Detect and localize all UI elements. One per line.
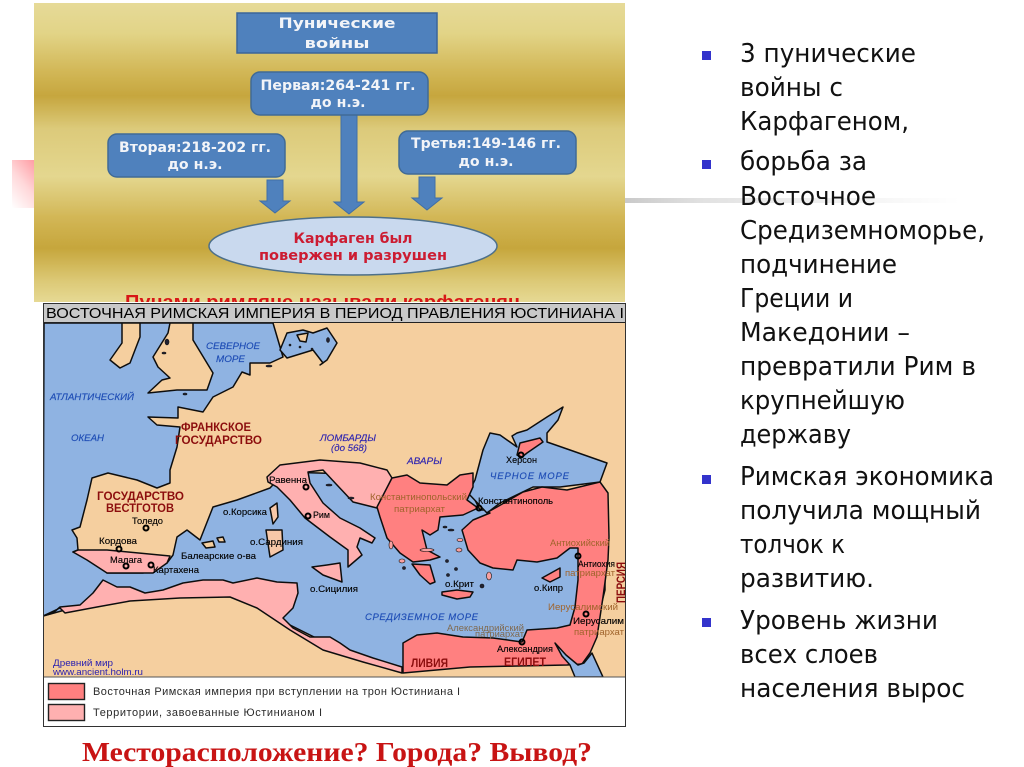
Sardinia xyxy=(266,530,283,557)
heading box: Punic wars: войны xyxy=(304,36,370,52)
bullet 2: Восточное xyxy=(740,182,876,212)
map frame xyxy=(44,304,626,726)
city labels: Иерусалим xyxy=(573,616,624,626)
legend: Территории, завоеванные Юстинианом I xyxy=(93,707,322,719)
bullet 3: получила мощный xyxy=(740,496,981,526)
sea labels: АТЛАНТИЧЕСКИЙ xyxy=(49,391,134,403)
Italy and Dalmatia xyxy=(267,460,392,567)
heading box: Punic wars xyxy=(237,13,437,53)
sea labels: СРЕДИЗЕМНОЕ МОРЕ xyxy=(365,612,479,623)
sea labels: ЧЕРНОЕ МОРЕ xyxy=(490,471,570,482)
box: first war: до н.э. xyxy=(310,95,366,111)
city labels: о.Корсика xyxy=(223,507,267,517)
bullet 3: развитию. xyxy=(740,564,874,594)
box: second war: Вторая:218-202 гг. xyxy=(119,140,271,156)
city labels: о.Кипр xyxy=(534,583,563,593)
map credit: www.ancient.holm.ru xyxy=(52,667,143,677)
box: second war xyxy=(108,134,285,177)
bullet 4: Уровень жизни xyxy=(740,606,938,636)
patriarchate labels xyxy=(370,492,624,639)
box: second war: до н.э. xyxy=(168,157,222,173)
state labels: ЛИВИЯ xyxy=(411,656,448,670)
city labels: Равенна xyxy=(269,475,307,485)
Britain xyxy=(148,323,213,393)
North Africa conquered territory xyxy=(43,578,402,673)
sea labels: ОКЕАН xyxy=(71,433,104,444)
bullet 4: всех слоев xyxy=(740,640,878,670)
box: third war: Третья:149-146 гг. xyxy=(411,136,561,152)
Gulf of Suez and Red Sea xyxy=(555,643,603,677)
bottom question caption: Месторасположение? Города? Вывод? xyxy=(82,737,592,767)
city labels: о.Крит xyxy=(445,579,474,589)
Crete xyxy=(442,590,473,599)
city labels: Антиохия xyxy=(578,559,615,569)
state labels: ГОСУДАРСТВО xyxy=(175,433,262,447)
sea labels: (до 568) xyxy=(331,443,367,454)
bullet 1 xyxy=(702,39,916,137)
city labels: о.Сицилия xyxy=(310,584,358,594)
arrow: second war to Carthage xyxy=(260,180,290,213)
bullet 4 xyxy=(702,606,965,704)
patriarchate labels: патриархат xyxy=(565,568,615,578)
state labels xyxy=(97,420,628,670)
heading box: Punic wars: Пунические xyxy=(278,16,396,32)
patriarchate labels: Константинопольский xyxy=(370,492,467,502)
legend: Восточная Римская империя при вступлении на трон Юстиниана I xyxy=(93,686,460,698)
map title bar: ВОСТОЧНАЯ РИМСКАЯ ИМПЕРИЯ В ПЕРИОД ПРАВЛЕНИЯ ЮСТИНИАНА I xyxy=(46,305,624,322)
patriarchate labels: Александрийский xyxy=(447,623,524,633)
Balearic islands xyxy=(202,537,225,548)
bullet list xyxy=(702,39,994,704)
state labels: ВЕСТГОТОВ xyxy=(106,501,174,515)
bullet 3: толчок к xyxy=(740,530,845,560)
city labels: Толедо xyxy=(132,516,163,526)
box: first war: Первая:264-241 гг. xyxy=(260,78,416,94)
patriarchate labels: Антиохийский xyxy=(550,538,610,548)
bullet 1: войны с xyxy=(740,73,843,103)
arrow: third war to Carthage xyxy=(412,177,442,210)
bullet 1: Карфагеном, xyxy=(740,107,909,137)
Peloponnese xyxy=(412,564,435,584)
state labels: ГОСУДАРСТВО xyxy=(97,489,184,503)
bullet 2: превратили Рим в xyxy=(740,352,976,382)
city labels: Балеарские о-ва xyxy=(181,551,256,561)
South Spain conquered territory xyxy=(73,550,170,573)
sea labels: АВАРЫ xyxy=(406,456,443,467)
clipped red caption: Пунами римляне называли карфагенян xyxy=(125,292,520,312)
Crimea xyxy=(517,438,543,457)
map background land xyxy=(43,303,626,727)
Sicily xyxy=(312,563,342,582)
patriarchate labels: патриархат xyxy=(574,627,624,637)
state labels: ЕГИПЕТ xyxy=(504,655,547,669)
panel: Punic wars diagram xyxy=(34,3,625,312)
box: third war xyxy=(399,131,576,174)
bullet 2 xyxy=(702,147,985,450)
bullet 2: крупнейшую xyxy=(740,386,905,416)
bullet 2: Средиземноморье, xyxy=(740,216,985,246)
sea labels: МОРЕ xyxy=(216,354,246,365)
Corsica xyxy=(270,503,278,524)
bullet 4: населения вырос xyxy=(740,674,965,704)
Balkans xyxy=(377,473,478,562)
state labels: ФРАНКСКОЕ xyxy=(181,420,251,434)
panel: map of the Eastern Roman Empire xyxy=(43,303,628,727)
bullet 2: Греции и xyxy=(740,284,853,314)
sea labels: ЛОМБАРДЫ xyxy=(319,433,377,444)
sea labels xyxy=(49,341,570,623)
patriarchate labels: патриархат xyxy=(394,504,445,514)
map credit xyxy=(52,658,143,677)
Black Sea and Azov xyxy=(468,407,607,513)
city markers xyxy=(116,452,588,644)
city labels: Картахена xyxy=(153,565,199,575)
bullet 3 xyxy=(702,462,994,594)
city labels: Константинополь xyxy=(478,496,553,506)
arrow: first war to Carthage xyxy=(334,115,364,214)
state labels: ПЕРСИЯ xyxy=(614,562,628,603)
box: third war: до н.э. xyxy=(458,154,514,170)
city labels: Рим xyxy=(313,510,330,520)
patriarchate labels: патриархат xyxy=(475,629,524,639)
city labels xyxy=(99,455,624,654)
Asia Minor, Levant and Egypt xyxy=(403,482,609,673)
bullet 2: борьба за xyxy=(740,147,867,177)
city labels: о.Сардиния xyxy=(250,537,303,547)
decorative red accent block xyxy=(12,160,52,208)
bullet 2: державу xyxy=(740,420,851,450)
legend xyxy=(43,677,626,727)
ellipse: Carthage was defeated: повержен и разрушен xyxy=(259,248,447,264)
box: first war xyxy=(251,72,428,115)
ellipse: Carthage was defeated xyxy=(209,217,497,275)
seas: Atlantic and Mediterranean xyxy=(43,323,605,668)
decorative grey rule xyxy=(620,198,960,203)
small islands xyxy=(162,338,492,588)
Baltic Sea xyxy=(280,328,337,365)
Baltic island xyxy=(297,333,308,342)
bullet 1: 3 пунические xyxy=(740,39,916,69)
city labels: Кордова xyxy=(99,536,137,546)
city labels: Александрия xyxy=(497,644,553,654)
map credit: Древний мир xyxy=(53,658,113,668)
city labels: Херсон xyxy=(506,455,537,465)
patriarchate labels: Иерусалимский xyxy=(548,602,618,612)
city labels: Малага xyxy=(110,555,142,565)
sea labels: СЕВЕРНОЕ xyxy=(206,341,261,352)
ellipse: Carthage was defeated: Карфаген был xyxy=(294,231,412,247)
bullet 2: Македонии – xyxy=(740,318,910,348)
Ireland xyxy=(110,323,140,368)
bullet 3: Римская экономика xyxy=(740,462,994,492)
Cyprus xyxy=(542,568,560,582)
bullet 2: подчинение xyxy=(740,250,897,280)
